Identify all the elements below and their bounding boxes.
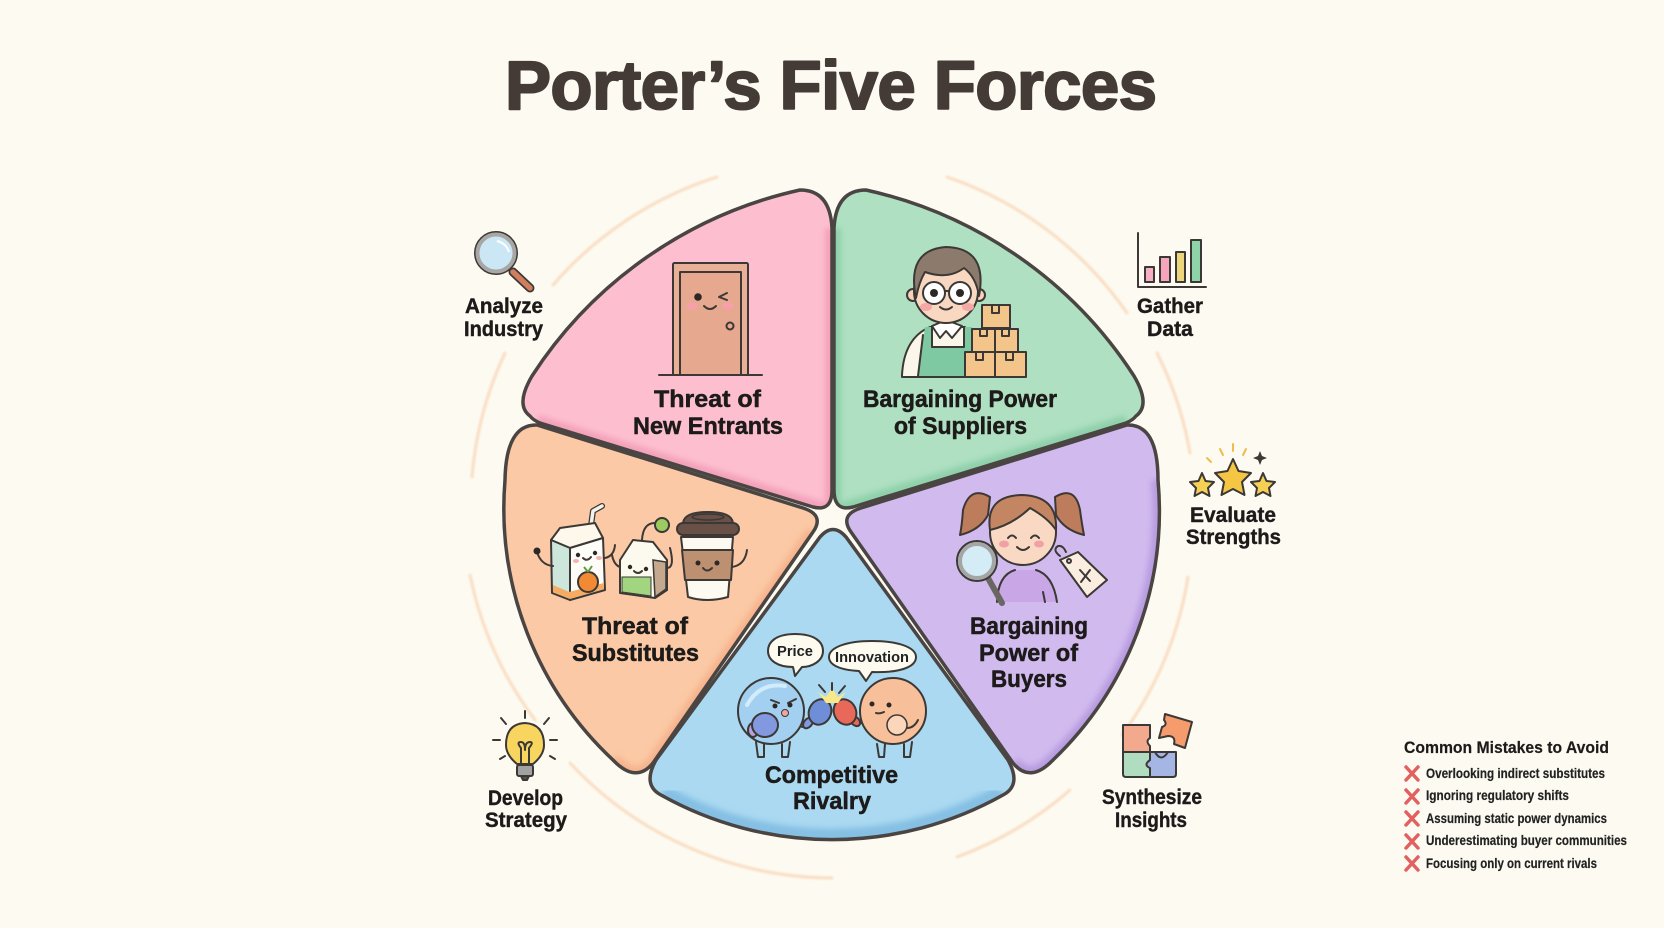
label: threat of new entrants: New Entrants — [633, 413, 783, 440]
item: focusing only on current rivals: Focusing only on current rivals — [1426, 856, 1597, 871]
step: synthesize insights — [1102, 714, 1202, 832]
item: ignoring regulatory shifts: Ignoring regulatory shifts — [1426, 788, 1569, 803]
icon: buyer girl with magnifier and price tag — [957, 493, 1107, 603]
panel: bargaining power of buyers — [847, 425, 1159, 773]
label: gather data — [1137, 295, 1203, 341]
item: assuming static power dynamics: Assuming static power dynamics — [1426, 811, 1607, 826]
item: underestimating buyer communities: Underestimating buyer communities — [1426, 833, 1627, 848]
icon: price speech bubble: Price — [777, 643, 813, 660]
icon: light bulb — [493, 711, 557, 780]
label: gather data: Gather — [1137, 295, 1203, 318]
icon: juice box — [534, 506, 615, 600]
step: analyze industry — [464, 232, 543, 341]
label: threat of substitutes: Threat of — [582, 613, 689, 640]
label: bargaining power of buyers: Bargaining — [970, 613, 1088, 640]
label: threat of substitutes: Substitutes — [572, 640, 699, 667]
panel: competitive rivalry — [650, 530, 1014, 840]
label: bargaining power of suppliers: of Suppliers — [894, 413, 1027, 440]
icon: bar chart — [1138, 233, 1206, 287]
label: bargaining power of buyers: Buyers — [991, 666, 1067, 693]
heading: common mistakes: Common Mistakes to Avoid — [1404, 739, 1609, 757]
title: Porter’s Five Forces — [505, 47, 1157, 124]
label: analyze industry: Industry — [464, 318, 543, 341]
icon: magnifying glass — [475, 232, 530, 288]
step: evaluate strengths — [1186, 444, 1281, 549]
label: develop strategy: Develop — [488, 787, 563, 810]
icon: innovation speech bubble — [829, 641, 916, 681]
panel: threat of new entrants — [523, 190, 832, 512]
label: evaluate strengths: Strengths — [1186, 526, 1281, 549]
label: synthesize insights: Synthesize — [1102, 786, 1202, 809]
label: bargaining power of buyers: Power of — [979, 640, 1079, 667]
label: gather data: Data — [1147, 318, 1193, 341]
label: analyze industry — [464, 295, 543, 341]
icon: innovation speech bubble: Innovation — [835, 649, 909, 666]
label: analyze industry: Analyze — [465, 295, 543, 318]
label: synthesize insights: Insights — [1115, 809, 1187, 832]
label: threat of new entrants — [633, 386, 783, 440]
icon: smiling door — [659, 263, 762, 375]
label: competitive rivalry: Competitive — [765, 762, 898, 789]
icon: tea bag — [612, 518, 672, 598]
callout: common mistakes to avoid — [1404, 739, 1627, 871]
label: develop strategy: Strategy — [485, 809, 567, 832]
label: bargaining power of suppliers — [863, 386, 1057, 440]
icon: boxing characters — [738, 678, 926, 757]
panel: threat of substitutes — [504, 425, 817, 773]
label: evaluate strengths — [1186, 504, 1281, 549]
icon: puzzle pieces — [1123, 714, 1192, 777]
label: threat of substitutes — [572, 613, 699, 667]
label: competitive rivalry: Rivalry — [793, 788, 872, 815]
label: evaluate strengths: Evaluate — [1190, 504, 1276, 527]
icon: price speech bubble — [768, 634, 823, 676]
item: overlooking indirect substitutes: Overlooking indirect substitutes — [1426, 766, 1605, 781]
label: threat of new entrants: Threat of — [654, 386, 762, 413]
icon: supplier with boxes — [902, 247, 1026, 377]
panel: bargaining power of suppliers — [834, 190, 1143, 512]
icon: three stars — [1190, 444, 1275, 496]
label: bargaining power of buyers — [970, 613, 1088, 693]
label: competitive rivalry — [765, 762, 898, 815]
label: bargaining power of suppliers: Bargaining Power — [863, 386, 1057, 413]
label: develop strategy — [485, 787, 567, 832]
icon: coffee cup — [677, 512, 747, 600]
step: gather data — [1137, 233, 1206, 341]
step: develop strategy — [485, 711, 567, 832]
orange cycle ring — [470, 177, 1190, 878]
label: synthesize insights — [1102, 786, 1202, 832]
